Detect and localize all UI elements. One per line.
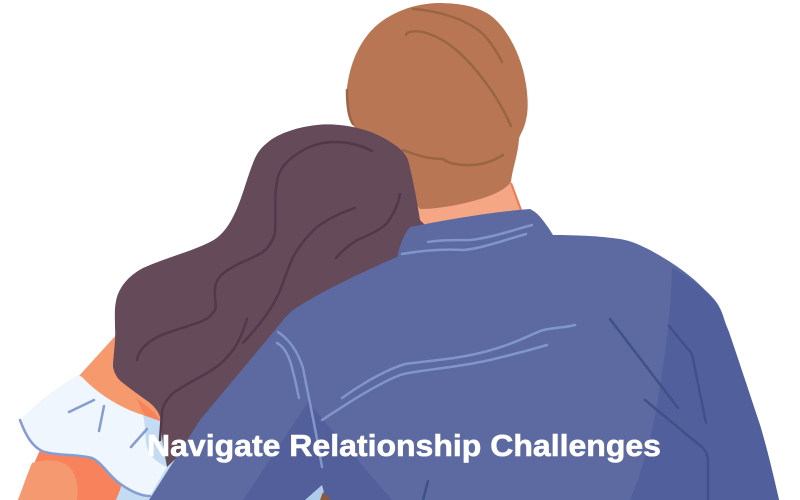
man's jacket xyxy=(149,209,779,500)
light stitching xyxy=(277,225,575,467)
man's neck xyxy=(415,183,521,235)
dark creases xyxy=(423,319,708,500)
title: Navigate Relationship Challenges xyxy=(147,428,661,463)
woman's hair xyxy=(113,124,430,467)
man's head xyxy=(347,3,528,209)
gap between arms xyxy=(305,485,326,500)
woman's arm and sleeve xyxy=(18,333,175,500)
sleeve shade xyxy=(630,267,779,500)
back shade xyxy=(243,402,392,500)
